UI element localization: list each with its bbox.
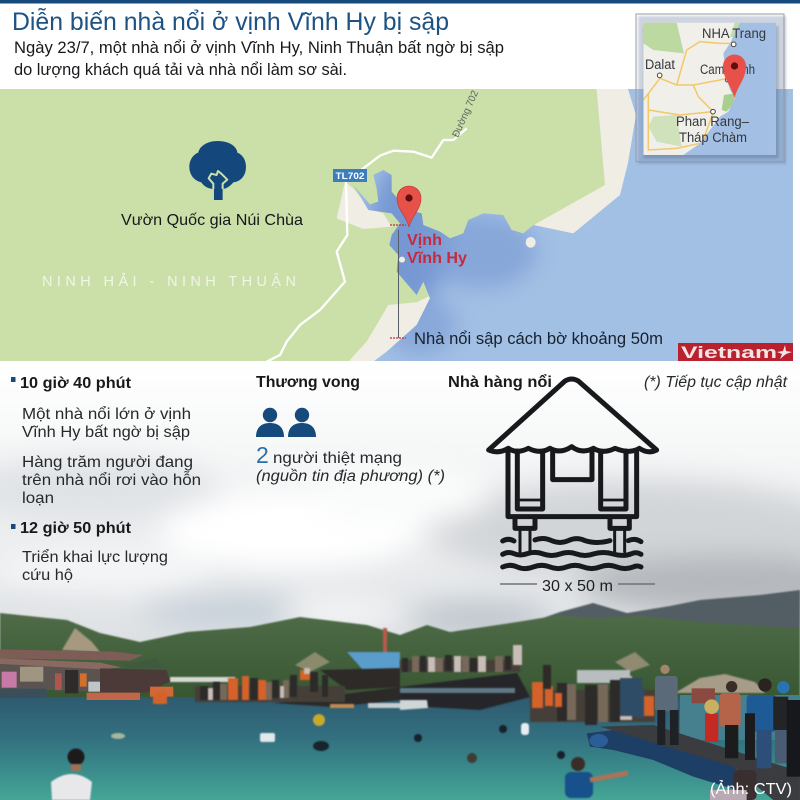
logo: Vietnam+: Vietnam	[681, 343, 777, 362]
casualties count: người thiệt mạng	[273, 450, 402, 467]
inset labels	[645, 26, 766, 145]
label: Vịnh Vĩnh Hy	[407, 232, 467, 267]
heading: floating restaurant: Nhà hàng nổi	[448, 374, 552, 391]
photo: left floating restaurant	[0, 649, 173, 700]
map: roads	[267, 128, 467, 362]
panel: inset locator map	[636, 14, 786, 164]
top bar	[0, 0, 800, 4]
timeline: 12h50: Triển khai lực lượng	[22, 548, 168, 566]
panel: location map	[0, 89, 793, 362]
distance marker line	[390, 225, 406, 338]
dimension: 30 x 50 m: 30 x 50 m	[542, 578, 613, 595]
panel: timeline	[11, 375, 201, 584]
map: beige coast and village areas	[337, 89, 653, 362]
timeline: 10h40: loạn	[22, 490, 54, 507]
photo: sea water	[0, 695, 800, 800]
timeline: 12h50: 12 giờ 50 phút	[20, 520, 131, 537]
photo: mountains	[0, 590, 800, 705]
label: distance to shore: Nhà nổi sập cách bờ khoảng 50m	[414, 330, 663, 348]
timeline: 12h50	[11, 520, 168, 584]
intro text: Ngày 23/7, một nhà nổi ở vịnh Vĩnh Hy, Ninh Thuận bất ngờ bị sập	[14, 38, 504, 57]
photo: swimmers and floating objects	[51, 714, 628, 800]
note: to be updated: (*) Tiếp tục cập nhật	[644, 374, 788, 391]
casualties heading: Thương vong	[256, 374, 360, 391]
label: national park: Vườn Quốc gia Núi Chùa	[121, 212, 303, 229]
inset map image	[643, 23, 776, 155]
background photo: sky and rescue scene	[0, 431, 800, 800]
inset labels: Dalat	[645, 57, 675, 72]
casualties count: (nguồn tin địa phương) (*)	[256, 468, 445, 485]
timeline: 10h40: Vĩnh Hy bất ngờ bị sập	[22, 424, 190, 441]
onlooker in grey shirt	[655, 665, 679, 745]
swimmer in blue shirt	[565, 757, 628, 798]
inset labels: NHA Trang	[702, 26, 766, 41]
icon: two people	[256, 408, 316, 437]
man in white shirt, foreground	[51, 748, 92, 800]
inset frame and shadow	[636, 14, 786, 164]
inset icon: location pin	[723, 54, 746, 98]
icon: floating house on stilts	[489, 379, 657, 569]
timeline: 12h50: cứu hộ	[22, 567, 73, 584]
photo: collapsed floating house	[273, 628, 530, 710]
icon: tree	[189, 141, 246, 200]
map: land	[0, 89, 793, 361]
inset labels: Cam Ranh	[700, 62, 755, 77]
logo: Vietnam+	[678, 343, 793, 362]
intro text	[14, 38, 504, 79]
inset labels: Phan Rang–	[676, 114, 749, 129]
photo credit: (Ảnh: CTV)	[710, 779, 792, 798]
timeline: 10h40: Một nhà nổi lớn ở vịnh	[22, 405, 191, 423]
panel: casualties	[256, 374, 445, 485]
title: Diễn biến nhà nổi ở vịnh Vĩnh Hy bị sập	[12, 7, 449, 36]
inset labels: Tháp Chàm	[679, 130, 747, 145]
timeline: 10h40: Hàng trăm người đang	[22, 454, 193, 471]
label: Vịnh Vĩnh Hy: Vĩnh Hy	[407, 250, 467, 267]
photo: cloudy sky	[0, 431, 800, 695]
label: district: NINH HẢI - NINH THUẬN	[42, 273, 296, 290]
map: road label Đường 702: Đường 702	[451, 89, 481, 139]
intro text: do lượng khách quá tải và nhà nổi làm sơ sài.	[14, 60, 347, 79]
map: sea and bay	[353, 89, 793, 362]
casualties count: 2	[256, 442, 269, 468]
label: Vịnh Vĩnh Hy: Vịnh	[407, 232, 442, 249]
map: road shield TL702	[333, 169, 367, 182]
photo: pier with onlookers	[587, 665, 800, 800]
timeline: 10h40: 10 giờ 40 phút	[20, 375, 131, 392]
timeline: 10h40: trên nhà nổi rơi vào hỗn	[22, 470, 201, 489]
onlookers on the pier	[692, 678, 800, 800]
icon: location pin	[397, 186, 421, 227]
map: road shield TL702: TL702	[336, 171, 364, 182]
photo: crowd on the wreck	[153, 645, 655, 725]
casualties count	[256, 442, 445, 485]
timeline: 10h40	[11, 375, 201, 507]
